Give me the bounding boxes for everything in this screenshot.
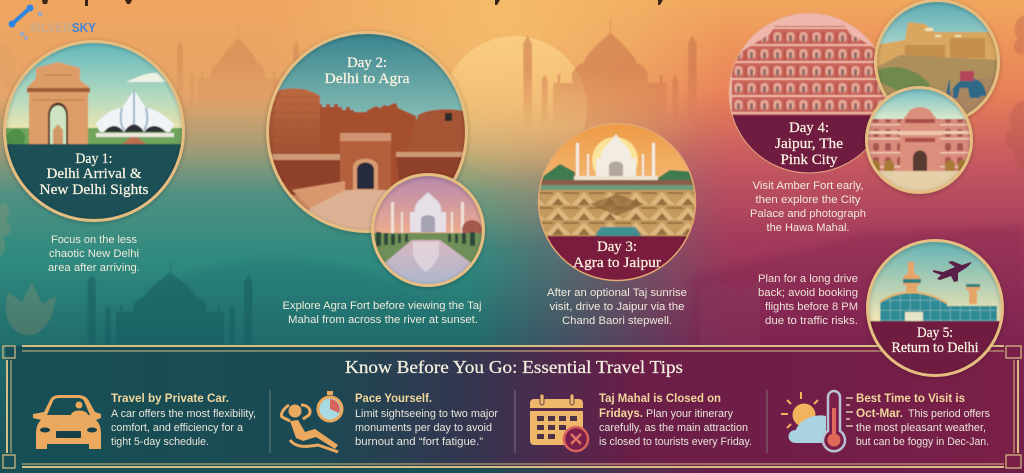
Day 5 illustration: airport: [869, 242, 1001, 362]
tip 3 text: Plan your itinerary: [646, 408, 733, 420]
Day 2 ring: [268, 32, 466, 232]
Day 3 description: visit, drive to Jaipur via the: [550, 301, 684, 313]
Day 3 heading: [573, 239, 661, 271]
panel: Day 1: [4, 41, 184, 274]
logo wordmark: SILVERSKY: [30, 21, 97, 35]
icon: calendar with cross: [530, 394, 588, 451]
Day 1 heading: Day 1:: [76, 151, 112, 167]
tip 3 text: [599, 391, 752, 448]
Day 2 heading: Delhi to Agra: [324, 71, 410, 87]
tip 1 text: tight 5-day schedule.: [111, 436, 209, 448]
tip 2 text: monuments per day to avoid: [355, 422, 492, 434]
Day 4 heading: Pink City: [780, 152, 838, 168]
Day 4 heading: Jaipur, The: [775, 136, 843, 152]
Day 3 description: After an optional Taj sunrise: [547, 287, 687, 299]
Day 2 heading: [324, 55, 410, 87]
Day 1 description: Focus on the less: [51, 234, 137, 246]
tip 3 text: Taj Mahal is Closed on: [599, 391, 721, 405]
Day 1 illustration: [4, 41, 184, 224]
Day 1 heading: Delhi Arrival &: [46, 166, 142, 182]
Day 1 heading: [40, 151, 149, 198]
silhouette: fort ruins lower right: [700, 280, 760, 345]
Day 5 description: [758, 273, 858, 327]
Day 3 heading: Day 3:: [597, 239, 637, 255]
tip 3: Taj Mahal closed Fridays: [530, 391, 752, 451]
panel: Day 4: [728, 0, 1001, 234]
tip 4 text: This period offers: [908, 408, 990, 420]
Day 4 ring: [729, 13, 889, 173]
tip 1 text: [111, 391, 256, 448]
Day 2 description: [282, 300, 482, 326]
icon: car: [33, 395, 101, 449]
Day 3 heading: Agra to Jaipur: [573, 255, 661, 271]
Day 3 description: [547, 287, 687, 327]
tips heading: Know Before You Go: Essential Travel Tips: [345, 357, 683, 377]
Day 3 description: Chand Baori stepwell.: [562, 315, 672, 327]
tip 4: best time to visit: [781, 391, 990, 451]
tip 1 text: comfort, and efficiency for a: [111, 422, 244, 434]
Day 2 description: Mahal from across the river at sunset.: [288, 314, 478, 326]
Day 4 inset: City Palace: [866, 87, 973, 195]
Day 4 description: Visit Amber Fort early,: [752, 180, 864, 192]
Day 5 heading: Day 5:: [917, 325, 953, 341]
panel: Day 5: [867, 240, 1004, 379]
Day 1 description: chaotic New Delhi: [49, 248, 139, 260]
Day 2 heading: Day 2:: [347, 55, 387, 71]
Day 4 inset: Amber Fort with elephant: [875, 0, 1001, 125]
Day 2 inset: Taj Mahal at sunset: [372, 174, 484, 287]
tip 1: private car: [33, 391, 256, 449]
tip 2 text: burnout and “fort fatigue.”: [355, 436, 483, 448]
Day 1 ring: [4, 42, 184, 220]
panel: travel tips: [3, 346, 1021, 468]
icon: person relaxing with stopwatch: [281, 391, 342, 452]
tip 3 text: Fridays.: [599, 406, 643, 420]
tip 2: pace yourself: [281, 391, 498, 452]
Day 5 description: due to traffic risks.: [765, 315, 858, 327]
tip 4 text: Best Time to Visit is: [856, 391, 965, 405]
Day 3 ring: [538, 124, 696, 280]
Day 1 description: [48, 234, 140, 274]
Day 1 description: area after arriving.: [48, 262, 140, 274]
Day 5 description: Plan for a long drive: [758, 273, 858, 285]
decorative floral motifs: [0, 15, 1024, 335]
tip 4 text: but can be foggy in Dec-Jan.: [856, 436, 989, 448]
Day 5 ring: [868, 240, 1002, 376]
tip 3 text: is closed to tourists every Friday.: [599, 436, 752, 448]
Day 2 description: Explore Agra Fort before viewing the Taj: [282, 300, 482, 312]
tip 4 text: the most pleasant weather,: [856, 422, 986, 434]
Day 5 heading: [892, 325, 978, 356]
Day 4 description: then explore the City: [756, 194, 861, 206]
Day 5 description: back; avoid booking: [758, 287, 858, 299]
panel: Day 3: [538, 123, 696, 327]
Day 4 heading: [775, 120, 843, 168]
panel: Day 2: [266, 32, 484, 326]
tip 1 text: Travel by Private Car.: [111, 391, 229, 405]
India Gate: [27, 62, 90, 144]
logo icon network: [9, 5, 42, 40]
Day 1 heading: New Delhi Sights: [40, 182, 149, 198]
Day 4 illustration: Hawa Mahal: [728, 12, 892, 175]
tip 4 text: [856, 391, 990, 448]
Day 4 description: [750, 180, 866, 234]
tip 2 text: [355, 391, 498, 448]
Day 4 description: Palace and photograph: [750, 208, 866, 220]
icon: sun, cloud and thermometer: [781, 391, 853, 451]
clipped title fragments at top edge: [42, 0, 663, 6]
Day 5 description: flights before 8 PM: [765, 301, 858, 313]
silhouette: dark Taj Mahal lower left: [88, 261, 252, 345]
icon: airplane: [933, 261, 972, 282]
Day 3 illustration: [538, 123, 696, 282]
logo: Silver Sky: [9, 5, 97, 40]
Day 5 heading: Return to Delhi: [892, 340, 978, 356]
silhouette: faded Taj Mahal centre: [523, 19, 697, 125]
tip 2 text: Pace Yourself.: [355, 391, 432, 405]
Lotus Temple: [96, 90, 174, 144]
Day 2 illustration: Agra Fort: [266, 33, 468, 235]
Day 4 description: the Hawa Mahal.: [766, 222, 850, 234]
silhouette: faded Taj Mahal upper left: [177, 38, 299, 84]
Day 4 heading: Day 4:: [789, 120, 829, 136]
tip 3 text: carefully, as the main attraction: [599, 422, 748, 434]
tip 4 text: Oct-Mar.: [856, 406, 903, 420]
tip 1 text: A car offers the most flexibility,: [111, 408, 256, 420]
tip 2 text: Limit sightseeing to two major: [355, 408, 498, 420]
